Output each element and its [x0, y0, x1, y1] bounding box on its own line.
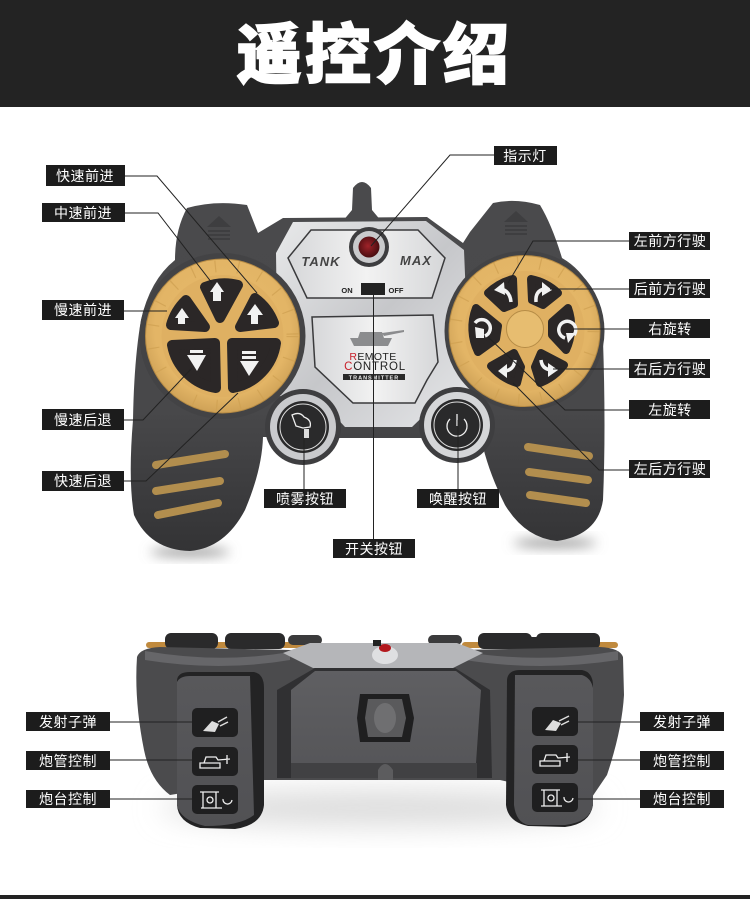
label: fire left — [26, 712, 110, 731]
callout lines front view — [124, 155, 629, 539]
label: medium forward: 中速前进 — [54, 205, 112, 221]
left button disc — [140, 253, 306, 419]
label: fast forward: 快速前进 — [56, 168, 114, 184]
label: slow forward: 慢速前进 — [54, 302, 112, 318]
tank emblem — [350, 330, 404, 346]
arrows on right disc — [475, 282, 576, 378]
label: barrel right — [640, 751, 724, 770]
grip mass — [136, 647, 624, 800]
fire button right — [532, 707, 578, 736]
forward slow button — [171, 300, 205, 327]
gold rim strips — [146, 642, 618, 648]
spray button — [265, 389, 341, 465]
indicator lamp — [349, 227, 389, 267]
forward fast button — [240, 298, 274, 327]
MAX badge: MAX — [400, 253, 432, 268]
controller body — [131, 201, 604, 551]
labels front view — [42, 146, 710, 558]
left paddle — [177, 672, 264, 829]
label: indicator: 指示灯 — [503, 148, 547, 164]
shoulder marks — [207, 211, 528, 240]
label: barrel right: 炮管控制 — [653, 753, 711, 769]
label: power switch: 开关按钮 — [345, 541, 403, 557]
label: power switch — [333, 539, 415, 558]
label: medium forward — [42, 203, 125, 222]
ON label: ON — [341, 286, 353, 295]
rotate-left button — [472, 308, 498, 352]
label: slow forward — [42, 300, 124, 320]
wake button — [419, 387, 495, 463]
turret button left — [192, 785, 238, 814]
fire button left — [192, 708, 238, 737]
arrows on left disc — [175, 282, 263, 376]
shoulder top highlight — [145, 651, 618, 666]
label: turret left: 炮台控制 — [39, 791, 97, 807]
remote rear view — [136, 633, 624, 829]
rear-right button — [535, 353, 564, 383]
label: rotate right — [629, 319, 710, 338]
CONTROL text: CONTROL — [344, 361, 406, 373]
silver faceplate — [276, 221, 470, 427]
OFF label: OFF — [388, 286, 404, 295]
label: barrel left — [26, 751, 110, 770]
label: rear right: 右后方行驶 — [634, 361, 706, 377]
barrel button right — [532, 745, 578, 774]
label: fire right — [640, 712, 724, 731]
callout lines rear view — [110, 722, 640, 799]
turret button right — [532, 783, 578, 812]
rotate-right button — [552, 308, 571, 350]
label: rear left: 左后方行驶 — [634, 461, 706, 477]
label: barrel left: 炮管控制 — [39, 753, 97, 769]
label: rotate left: 左旋转 — [648, 402, 692, 418]
right button disc — [444, 251, 604, 411]
top buttons — [165, 633, 600, 651]
antenna — [342, 182, 382, 222]
upper panel — [288, 230, 445, 298]
TANK badge: TANK — [301, 254, 341, 269]
label: slow reverse: 慢速后退 — [54, 412, 112, 428]
centre housing — [277, 668, 492, 778]
label: turret right — [640, 790, 724, 808]
label: wake — [417, 489, 499, 508]
label: rear front: 后前方行驶 — [634, 281, 706, 297]
title: 遥控介绍 — [236, 18, 512, 92]
reverse slow button — [172, 343, 216, 388]
rear-left button — [491, 353, 521, 383]
footer band — [0, 895, 750, 899]
rear LED — [372, 640, 398, 664]
floor shadow rear view — [160, 790, 600, 826]
charge port — [378, 764, 393, 780]
label: rotate right: 右旋转 — [648, 321, 692, 337]
silver plate — [283, 643, 483, 668]
label: fast forward — [46, 165, 125, 186]
label: turret right: 炮台控制 — [653, 791, 711, 807]
label: fire left: 发射子弹 — [39, 714, 97, 730]
front-right button — [531, 279, 558, 305]
label: indicator — [494, 146, 557, 165]
label: fire right: 发射子弹 — [653, 714, 711, 730]
label: wake: 唤醒按钮 — [429, 491, 487, 507]
label: spray: 喷雾按钮 — [276, 491, 334, 507]
remote front view — [131, 182, 604, 556]
forward medium button — [205, 283, 238, 318]
label: fast reverse: 快速后退 — [54, 473, 112, 489]
TRANSMITTER strip — [343, 374, 405, 382]
grip stripes — [156, 447, 589, 515]
label: turret left — [26, 790, 110, 808]
centre hub — [506, 310, 544, 348]
rear switch — [357, 694, 414, 742]
label: spray — [264, 489, 346, 508]
label: front left: 左前方行驶 — [634, 233, 706, 249]
TRANSMITTER strip: TRANSMITTER — [349, 376, 399, 382]
header band — [0, 0, 750, 107]
labels rear view — [26, 712, 724, 808]
label: fast reverse — [42, 471, 124, 491]
centre face — [291, 671, 481, 763]
label: slow reverse — [42, 409, 124, 430]
power switch — [361, 283, 385, 295]
front-left button — [488, 279, 514, 308]
right paddle — [506, 670, 593, 827]
REMOTE text: REMOTE — [349, 351, 397, 363]
reverse fast button — [232, 343, 276, 388]
lower panel — [312, 315, 438, 403]
barrel button left — [192, 747, 238, 776]
label: rotate left — [629, 400, 710, 419]
centre lower band — [291, 763, 477, 778]
